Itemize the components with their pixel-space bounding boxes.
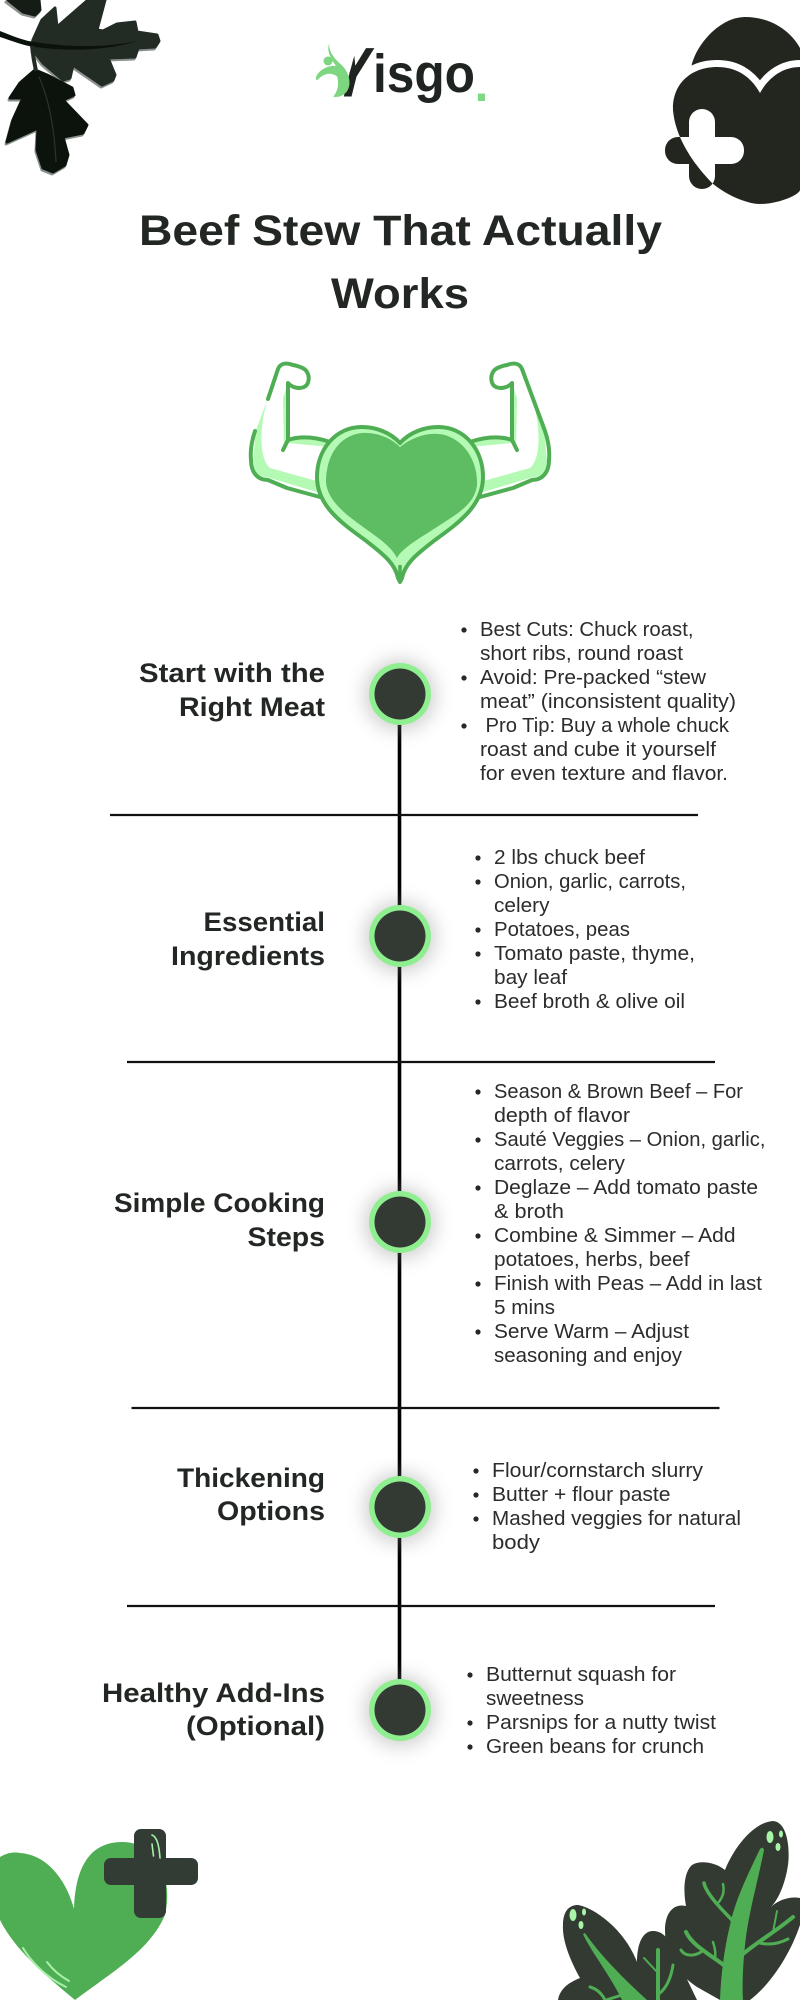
bullet list: Season & Brown Beef – For — [494, 1080, 743, 1103]
section: Essential Ingredients — [171, 846, 695, 1013]
bullet list: Green beans for crunch — [486, 1735, 704, 1758]
bullet list: depth of flavor — [494, 1104, 630, 1127]
icon: oak leaves top left — [0, 0, 159, 174]
bullet list: Mashed veggies for natural — [492, 1507, 741, 1530]
left arm — [251, 364, 335, 498]
section: Thickening Options — [177, 1459, 741, 1554]
bullet list: Sauté Veggies – Onion, garlic, — [494, 1128, 766, 1151]
heading: Ingredients — [171, 941, 325, 971]
icon: green heart with cross bottom left — [0, 1829, 198, 2000]
bullet list: 5 mins — [494, 1296, 555, 1319]
divider 3 — [132, 1407, 720, 1409]
heading: Thickening — [177, 1463, 325, 1493]
heading — [139, 658, 325, 722]
heart — [317, 427, 483, 582]
heading: Options — [217, 1496, 325, 1526]
title: Beef Stew That Actually — [139, 207, 662, 255]
heading: Healthy Add-Ins — [102, 1678, 325, 1708]
timeline node — [364, 1187, 436, 1259]
bullet list: Beef broth & olive oil — [494, 990, 685, 1013]
bullet list — [475, 1080, 766, 1367]
heading: (Optional) — [186, 1711, 325, 1741]
bullet list: Parsnips for a nutty twist — [486, 1711, 716, 1734]
right arm — [465, 364, 549, 498]
title — [139, 207, 662, 318]
heading: Start with the — [139, 658, 325, 688]
bullet list: 2 lbs chuck beef — [494, 846, 645, 869]
bullet list: body — [492, 1531, 541, 1554]
bullet list: for even texture and flavor. — [480, 762, 728, 785]
logo — [316, 44, 485, 103]
icon: heart with cross top right — [665, 17, 800, 204]
bullet list — [461, 618, 736, 785]
heading: Steps — [248, 1222, 325, 1252]
bullet list — [473, 1459, 741, 1554]
icon: dark plant bottom right — [558, 1821, 800, 2000]
icon: green heart with flexing arms — [251, 364, 549, 582]
section: Simple Cooking Steps — [114, 1080, 766, 1367]
bullet list: sweetness — [486, 1687, 584, 1710]
bullet list — [467, 1663, 716, 1758]
bullet list: potatoes, herbs, beef — [494, 1248, 690, 1271]
bullet list: Deglaze – Add tomato paste — [494, 1176, 758, 1199]
logo wordmark: . — [474, 56, 488, 112]
bullet list: & broth — [494, 1200, 564, 1223]
timeline spine — [398, 690, 401, 1700]
divider 2 — [127, 1061, 715, 1063]
bullet list: Butter + flour paste — [492, 1483, 670, 1506]
section: Healthy Add-Ins — [102, 1663, 716, 1758]
bullet list: Tomato paste, thyme, — [494, 942, 695, 965]
bullet list: carrots, celery — [494, 1152, 626, 1175]
bullet list — [475, 846, 695, 1013]
bullet list: Combine & Simmer – Add — [494, 1224, 736, 1247]
logo wordmark: isgo — [373, 44, 475, 104]
bullet list: short ribs, round roast — [480, 642, 683, 665]
heading: Right Meat — [179, 692, 325, 722]
heading: Simple Cooking — [114, 1188, 325, 1218]
divider 1 — [110, 814, 698, 816]
timeline node — [364, 901, 436, 973]
heading — [114, 1188, 325, 1252]
bullet list: roast and cube it yourself — [480, 738, 716, 761]
divider 4 — [127, 1605, 715, 1607]
heading — [171, 907, 325, 971]
timeline node — [364, 659, 436, 731]
bullet list: Serve Warm – Adjust — [494, 1320, 689, 1343]
bullet list: meat” (inconsistent quality) — [480, 690, 736, 713]
section: Start with the Right Meat — [139, 618, 736, 785]
bullet list: bay leaf — [494, 966, 567, 989]
heading — [177, 1463, 325, 1526]
bullet list: Butternut squash for — [486, 1663, 676, 1686]
timeline node — [364, 1675, 436, 1747]
bullet list: Finish with Peas – Add in last — [494, 1272, 762, 1295]
bullet list: Potatoes, peas — [494, 918, 630, 941]
title: Works — [331, 270, 469, 318]
bullet list: celery — [494, 894, 550, 917]
bullet list: Avoid: Pre-packed “stew — [480, 666, 706, 689]
heading — [102, 1678, 325, 1741]
timeline node — [364, 1472, 436, 1544]
bullet list: Onion, garlic, carrots, — [494, 870, 686, 893]
bullet list: Flour/cornstarch slurry — [492, 1459, 704, 1482]
bullet list: seasoning and enjoy — [494, 1344, 683, 1367]
bullet list: Pro Tip: Buy a whole chuck — [486, 714, 730, 737]
bullet list: Best Cuts: Chuck roast, — [480, 618, 694, 641]
logo figure — [316, 43, 350, 97]
logo wordmark: Y — [331, 35, 377, 109]
heading: Essential — [204, 907, 325, 937]
